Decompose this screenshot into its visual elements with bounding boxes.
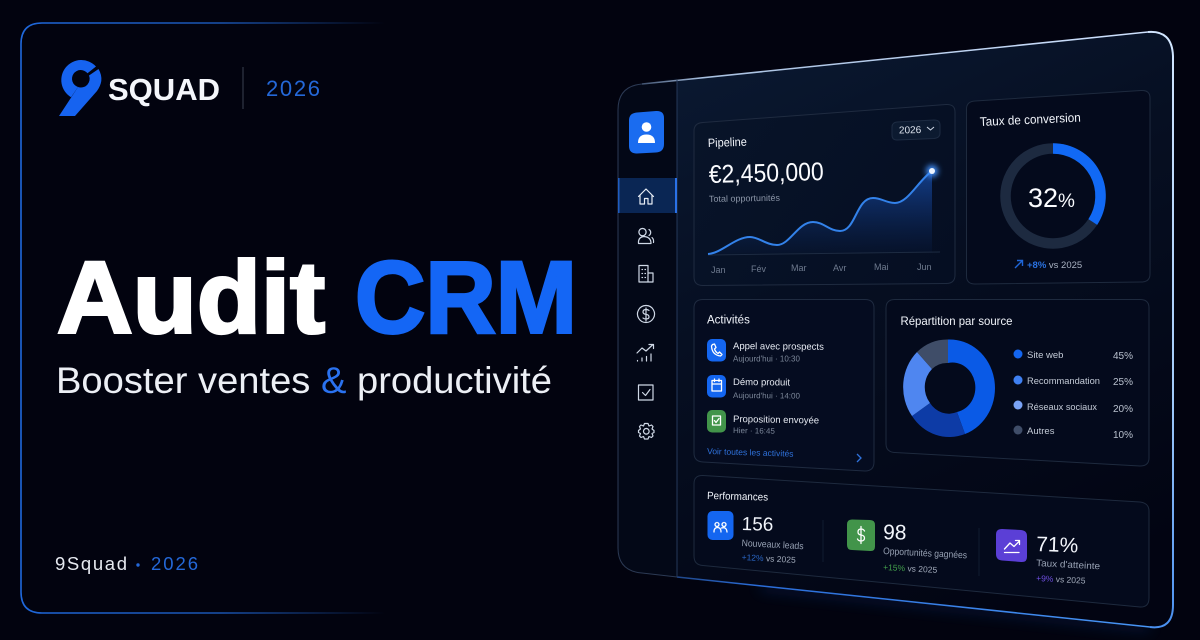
metric: leads	[708, 511, 804, 565]
panel: pipeline	[694, 104, 955, 286]
pipeline caption: Total opportunités	[709, 193, 781, 204]
source heading: Répartition par source	[900, 314, 1013, 328]
month axis labels: Mai	[874, 262, 889, 272]
metric: won deals: Opportunités gagnées	[883, 546, 968, 561]
metric: leads: 156	[741, 514, 774, 536]
performances card	[694, 475, 1149, 607]
month axis labels	[711, 262, 932, 275]
activities link	[707, 446, 861, 462]
metric: leads: Nouveaux leads	[741, 538, 804, 552]
inner edge glow	[1167, 140, 1171, 600]
source card	[886, 300, 1149, 466]
icon: building	[639, 266, 653, 282]
month axis labels: Mar	[791, 263, 807, 273]
legend: Autres	[1027, 426, 1055, 437]
icon: dollar	[638, 306, 655, 322]
icon: home	[638, 189, 654, 204]
icon: users	[638, 228, 654, 244]
icon: settings	[638, 424, 654, 439]
legend: Réseaux sociaux	[1027, 402, 1097, 413]
pipeline card	[694, 104, 955, 286]
logo divider	[242, 67, 244, 109]
year selector: 2026	[899, 125, 922, 136]
main title: CRM	[355, 240, 577, 354]
chart end dot	[926, 165, 938, 177]
year label: 2026	[266, 76, 320, 101]
legend: Recommandation	[1027, 376, 1100, 387]
sidebar avatar tile	[629, 111, 664, 154]
panel body	[618, 32, 1173, 627]
main title	[57, 240, 577, 354]
main title: Audit	[57, 240, 325, 354]
panel edges	[618, 32, 1173, 627]
legend: 25%	[1113, 377, 1133, 388]
left frame outline	[21, 23, 385, 613]
chart area	[708, 171, 932, 254]
month axis labels: Avr	[833, 263, 846, 273]
metric: leads: +12% vs 2025	[741, 552, 796, 565]
activity 2	[707, 375, 801, 401]
donut chart	[903, 339, 995, 437]
legend: 20%	[1113, 404, 1133, 415]
legend	[1014, 350, 1133, 441]
year selector	[892, 120, 940, 140]
logo wordmark: SQUAD	[108, 72, 220, 107]
activity 2: Démo produit	[733, 377, 790, 389]
activities link: Voir toutes les activités	[707, 446, 794, 459]
footer signature: 2026	[151, 553, 198, 574]
activity 3: Proposition envoyée	[733, 414, 819, 427]
metric: attainment: +9% vs 2025	[1036, 573, 1086, 586]
performances heading: Performances	[707, 490, 768, 504]
legend: Site web	[1027, 350, 1063, 361]
line chart	[708, 165, 940, 255]
metric: attainment: Taux d'atteinte	[1036, 558, 1100, 572]
logo: 9Squad	[59, 60, 220, 116]
sidebar	[618, 78, 677, 577]
conversion trend: +8% vs 2025	[1027, 260, 1082, 271]
activity 2: Aujourd'hui · 14:00	[733, 391, 801, 401]
conversion heading: Taux de conversion	[980, 111, 1081, 129]
metric: attainment: 71%	[1036, 533, 1079, 557]
icon: checkbox	[638, 385, 653, 400]
metric: won deals	[847, 520, 968, 575]
metric: attainment	[996, 529, 1100, 586]
conversion value: 32%	[1028, 183, 1075, 213]
dashboard panel	[618, 32, 1173, 627]
activity 1: Aujourd'hui · 10:30	[733, 354, 800, 364]
logo mark: stylised 9	[59, 60, 101, 116]
conversion card	[966, 90, 1150, 284]
metric: won deals: 98	[883, 521, 907, 545]
activities card	[694, 300, 874, 471]
panel: source breakdown	[886, 300, 1149, 466]
panel: activities	[694, 300, 874, 471]
chart line	[708, 171, 932, 254]
dashboard glow	[760, 70, 1175, 628]
activity 1	[707, 339, 824, 364]
dividers	[823, 520, 979, 576]
panel: performances	[694, 475, 1149, 607]
metric: won deals: +15% vs 2025	[883, 562, 938, 575]
sidebar active item	[618, 178, 677, 213]
activity 3	[707, 410, 819, 436]
panel: conversion rate	[966, 90, 1150, 284]
icon: chart	[637, 344, 654, 361]
conversion ring	[1006, 148, 1101, 244]
month axis labels: Jan	[711, 265, 726, 275]
month axis labels: Jun	[917, 262, 932, 272]
legend: 10%	[1113, 430, 1133, 441]
pipeline heading: Pipeline	[708, 135, 747, 150]
activities heading: Activités	[707, 314, 750, 326]
month axis labels: Fév	[751, 264, 767, 274]
activity 3: Hier · 16:45	[733, 426, 775, 436]
chart baseline	[708, 252, 940, 255]
footer signature	[55, 553, 198, 574]
legend: 45%	[1113, 351, 1133, 362]
pipeline value: €2,450,000	[708, 158, 824, 189]
footer signature: 9Squad	[55, 553, 127, 574]
activity 1: Appel avec prospects	[733, 341, 824, 353]
subtitle: Booster ventes & productivité	[56, 360, 552, 401]
